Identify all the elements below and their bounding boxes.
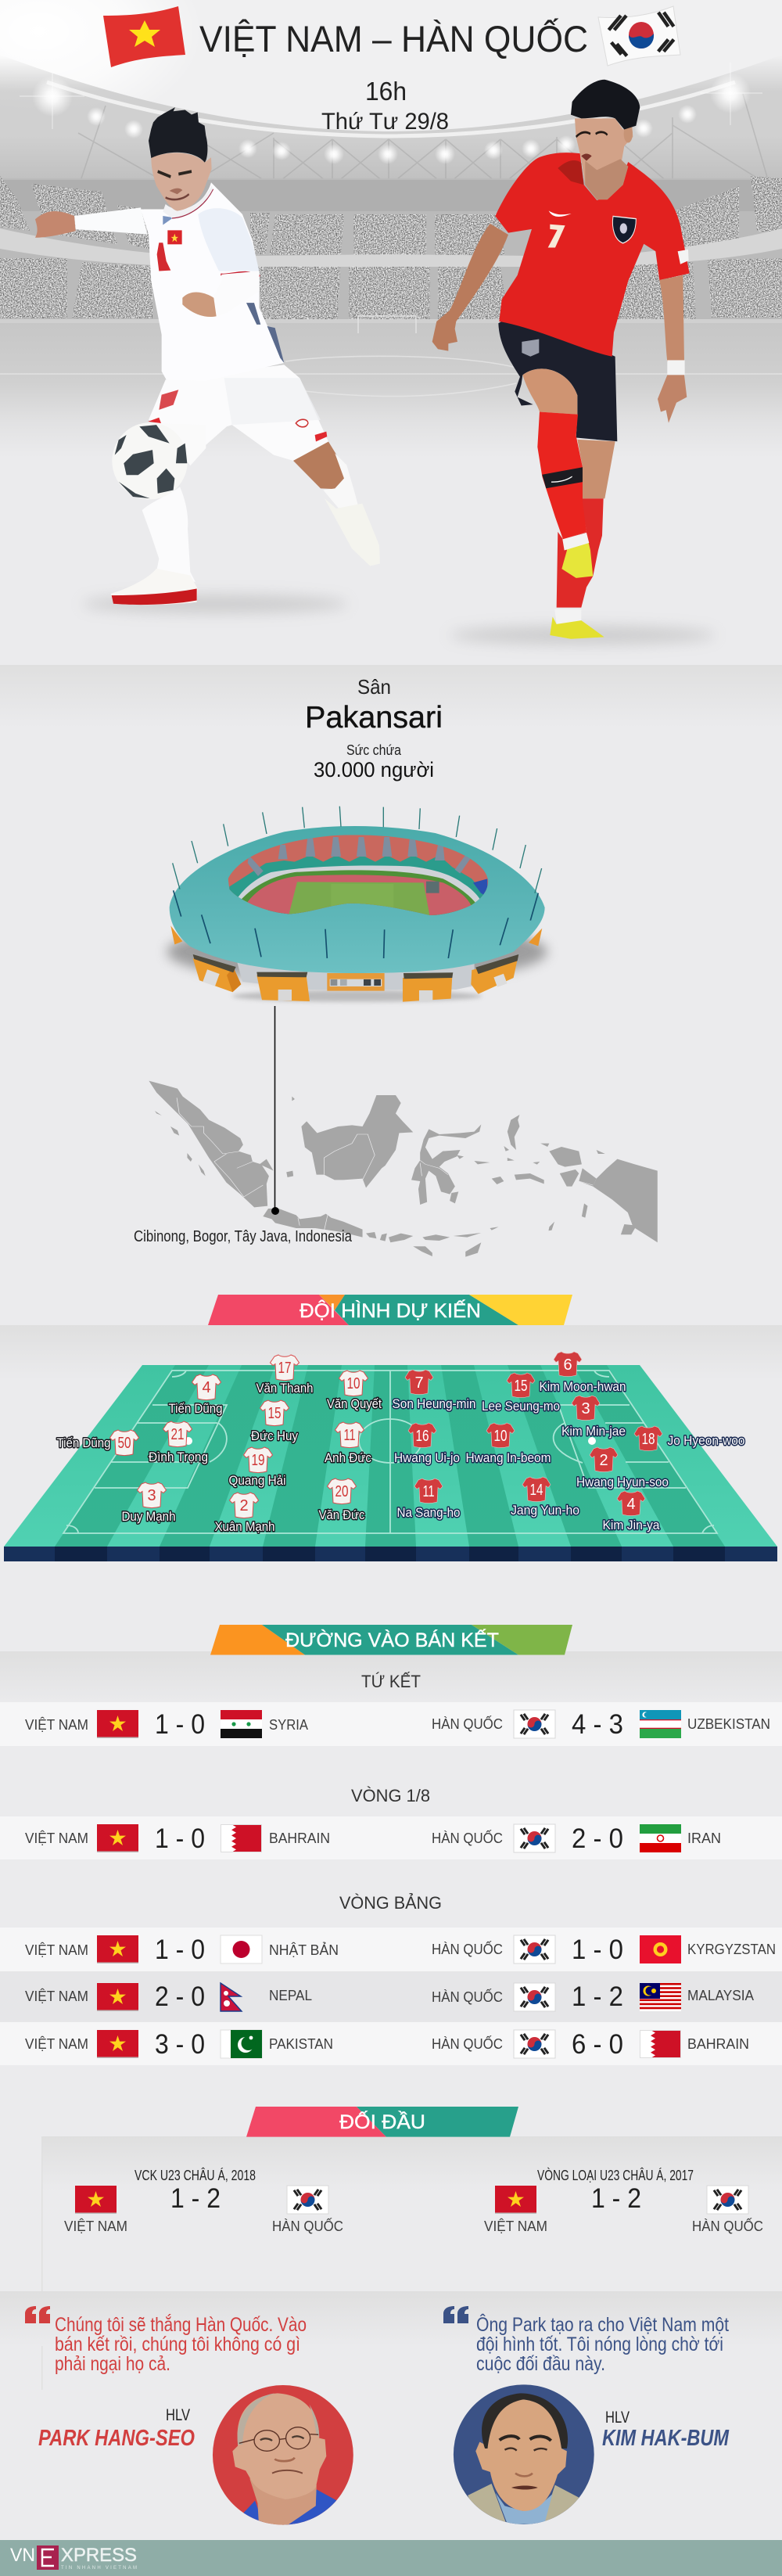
row: group match two: VIỆT NAM bbox=[25, 1989, 88, 2004]
section banner: line-up bbox=[208, 1295, 572, 1325]
name: Park Hang-seo: PARK HANG-SEO bbox=[38, 2426, 195, 2451]
row: quarter-final results bbox=[0, 1702, 782, 1746]
panel: hero match header bbox=[0, 0, 782, 645]
team: Vietnam players: 2 bbox=[239, 1497, 249, 1514]
team: South Korea players: Kim Min-jae bbox=[561, 1424, 626, 1439]
team: Vietnam players bbox=[56, 1355, 382, 1534]
row: group match two: NEPAL bbox=[269, 1988, 312, 2003]
team: South Korea players: Hwang Hyun-soo bbox=[576, 1475, 669, 1489]
team: Vietnam players: 11 bbox=[344, 1427, 355, 1444]
logo: VnExpress: TIN NHANH VIETNAM bbox=[61, 2566, 137, 2571]
team: South Korea players: Kim Moon-hwan bbox=[540, 1379, 626, 1394]
team: South Korea players: Kim Jin-ya bbox=[602, 1518, 660, 1532]
team: Vietnam players: Xuân Mạnh bbox=[214, 1519, 275, 1534]
row: group match three: HÀN QUỐC bbox=[432, 2035, 503, 2052]
label: capacity word: Sức chứa bbox=[346, 742, 402, 758]
label: coach title left: HLV bbox=[166, 2406, 190, 2424]
row: group match one: 1 - 0 bbox=[155, 1935, 205, 1965]
team: South Korea players: 16 bbox=[416, 1428, 429, 1445]
team: Vietnam players: Văn Quyết bbox=[327, 1396, 382, 1411]
row: quarter-final results: SYRIA bbox=[269, 1717, 308, 1733]
logo: VnExpress: VN bbox=[10, 2545, 35, 2566]
team: South Korea players: 14 bbox=[530, 1482, 543, 1499]
heading: stadium name: Pakansari bbox=[305, 701, 443, 735]
team: South Korea players: Hwang Ui-jo bbox=[394, 1450, 460, 1465]
match card: U23 Asian qualifiers 2017: VIỆT NAM bbox=[484, 2219, 547, 2234]
team: Vietnam players: Tiến Dũng bbox=[56, 1435, 111, 1450]
team: South Korea players: 6 bbox=[563, 1356, 572, 1374]
stadium background photo bbox=[0, 0, 782, 458]
match card: U23 Asian qualifiers 2017: HÀN QUỐC bbox=[692, 2218, 763, 2234]
team: Vietnam players: Anh Đức bbox=[325, 1450, 371, 1465]
team: Vietnam players: 20 bbox=[335, 1483, 349, 1500]
team: Vietnam players: 15 bbox=[267, 1405, 282, 1422]
team: South Korea players: 2 bbox=[599, 1452, 608, 1469]
team: Vietnam players: 4 bbox=[202, 1379, 211, 1396]
team: Vietnam players: Quang Hải bbox=[228, 1473, 286, 1488]
section banner: head to head bbox=[246, 2107, 518, 2137]
match card: U23 Asian finals 2018: HÀN QUỐC bbox=[272, 2218, 343, 2234]
team: Vietnam players: Văn Thanh bbox=[256, 1381, 313, 1396]
team: Vietnam players: Đình Trọng bbox=[149, 1450, 208, 1464]
shadow: left player bbox=[82, 595, 348, 613]
number: capacity: 30.000 người bbox=[314, 758, 434, 781]
team: South Korea players bbox=[393, 1352, 744, 1532]
row: group match three: PAKISTAN bbox=[269, 2036, 333, 2052]
row: group match one bbox=[0, 1928, 782, 1971]
team: South Korea players: Hwang In-beom bbox=[466, 1450, 551, 1465]
row: group match three: 6 - 0 bbox=[572, 2029, 623, 2060]
logo: VnExpress bbox=[10, 2545, 137, 2571]
match time: 16h bbox=[365, 77, 407, 106]
heading: round of 16: VÒNG 1/8 bbox=[351, 1786, 430, 1805]
heading: group stage: VÒNG BẢNG bbox=[339, 1893, 442, 1913]
team: South Korea players: 18 bbox=[641, 1431, 655, 1448]
player: South Korea forward in red kit bbox=[432, 80, 690, 639]
portrait: Kim Hak-bum bbox=[454, 2384, 594, 2527]
panel: coach quotes bbox=[0, 2291, 782, 2529]
match card: U23 Asian finals 2018: VIỆT NAM bbox=[64, 2219, 127, 2234]
quote: Park Hang-seo: phải ngại họ cả. bbox=[55, 2353, 170, 2375]
row: group match three bbox=[0, 2022, 782, 2065]
row: round of 16 results bbox=[0, 1816, 782, 1859]
title: VIỆT NAM – HÀN QUỐC bbox=[199, 18, 588, 59]
shadow: right player bbox=[450, 626, 716, 645]
row: quarter-final results: 1 - 0 bbox=[155, 1709, 205, 1740]
row: group match one: NHẬT BẢN bbox=[269, 1942, 339, 1958]
team: Vietnam players: 21 bbox=[170, 1426, 185, 1443]
row: group match one: VIỆT NAM bbox=[25, 1942, 88, 1958]
icon: South Korea waving flag bbox=[598, 6, 680, 66]
crowd stands bbox=[0, 176, 782, 321]
row: round of 16 results: VIỆT NAM bbox=[25, 1831, 88, 1846]
team: South Korea players: Na Sang-ho bbox=[397, 1505, 460, 1520]
match card: U23 Asian finals 2018: VCK U23 CHÂU Á, 2018 bbox=[135, 2168, 256, 2183]
row: round of 16 results: 1 - 0 bbox=[155, 1823, 205, 1854]
section banner: line-up: ĐỘI HÌNH DỰ KIẾN bbox=[300, 1299, 481, 1322]
match card: U23 Asian qualifiers 2017: 1 - 2 bbox=[591, 2183, 641, 2214]
team: Vietnam players: 50 bbox=[117, 1435, 131, 1452]
team: Vietnam players: Văn Đức bbox=[319, 1507, 365, 1522]
team: South Korea players: 11 bbox=[422, 1483, 435, 1500]
icon: Vietnam waving flag bbox=[103, 6, 185, 67]
row: group match two bbox=[0, 1971, 782, 2022]
row: group match one: KYRGYZSTAN bbox=[687, 1942, 776, 1957]
team: South Korea players: Lee Seung-mo bbox=[482, 1399, 560, 1414]
quote mark: red bbox=[25, 2306, 50, 2323]
section banner: road to semi-finals: ĐƯỜNG VÀO BÁN KẾT bbox=[285, 1629, 499, 1651]
team: Vietnam players: 3 bbox=[147, 1487, 156, 1504]
quote: Park Hang-seo: Chúng tôi sẽ thắng Hàn Quốc. Vào bbox=[55, 2313, 307, 2336]
team: South Korea players: Son Heung-min bbox=[393, 1396, 475, 1411]
row: group match three: BAHRAIN bbox=[687, 2036, 749, 2052]
row: group match two: 1 - 2 bbox=[572, 1981, 623, 2012]
row: group match two: HÀN QUỐC bbox=[432, 1989, 503, 2005]
quote: Kim Hak-bum: cuộc đối đầu này. bbox=[476, 2353, 605, 2375]
section banner: road to semi-finals bbox=[210, 1625, 572, 1655]
quote: Kim Hak-bum: Ông Park tạo ra cho Việt Nam một bbox=[476, 2313, 729, 2336]
row: round of 16 results: IRAN bbox=[687, 1831, 721, 1846]
section banner: head to head: ĐỐI ĐẦU bbox=[339, 2110, 425, 2133]
row: group match one: HÀN QUỐC bbox=[432, 1941, 503, 1957]
team: South Korea players: Jo Hyeon-woo bbox=[668, 1433, 744, 1448]
team: Vietnam players: 19 bbox=[252, 1452, 264, 1469]
connector line from stadium to map bbox=[274, 1006, 275, 1211]
team: South Korea players: Jang Yun-ho bbox=[511, 1503, 579, 1518]
row: group match two: 2 - 0 bbox=[155, 1981, 205, 2012]
label: coach title right: HLV bbox=[605, 2409, 630, 2427]
quote: Kim Hak-bum bbox=[476, 2313, 729, 2375]
panel: road to the semi-finals bbox=[0, 1625, 782, 2065]
team: Vietnam players: Tiến Dũng bbox=[169, 1401, 222, 1416]
match date: Thứ Tư 29/8 bbox=[321, 109, 449, 135]
stadium illustration bbox=[167, 807, 547, 1002]
player: Vietnam midfielder in white kit bbox=[35, 107, 380, 605]
match card: U23 Asian qualifiers 2017: VÒNG LOẠI U23 CHÂU Á, 2017 bbox=[537, 2167, 694, 2183]
row: round of 16 results: BAHRAIN bbox=[269, 1831, 330, 1846]
team: South Korea players: 7 bbox=[414, 1374, 424, 1392]
team: South Korea players: 4 bbox=[626, 1496, 636, 1513]
team: Vietnam players: Duy Mạnh bbox=[122, 1509, 175, 1524]
name: Kim Hak-bum: KIM HAK-BUM bbox=[602, 2426, 730, 2451]
match card: U23 Asian qualifiers 2017 bbox=[484, 2167, 763, 2234]
row: quarter-final results: VIỆT NAM bbox=[25, 1717, 88, 1733]
quote: Kim Hak-bum: đội hình tốt. Tôi nóng lòng chờ tới bbox=[476, 2333, 723, 2355]
football pitch bbox=[4, 1365, 777, 1561]
panel: predicted line-up bbox=[0, 1295, 782, 1561]
footer bar bbox=[0, 2540, 782, 2576]
row: round of 16 results: 2 - 0 bbox=[572, 1823, 623, 1854]
row: quarter-final results: HÀN QUỐC bbox=[432, 1716, 503, 1732]
row: group match three: VIỆT NAM bbox=[25, 2036, 88, 2052]
panel: head to head bbox=[41, 2107, 782, 2390]
team: Vietnam players: 10 bbox=[347, 1375, 360, 1392]
caption: stadium location: Cibinong, Bogor, Tây Java, Indonesia bbox=[134, 1228, 353, 1245]
map: Indonesia bbox=[149, 1081, 658, 1257]
match card: U23 Asian finals 2018: 1 - 2 bbox=[170, 2183, 221, 2214]
quote: Park Hang-seo: bán kết rồi, chúng tôi không có gì bbox=[55, 2333, 300, 2355]
team: South Korea players: 15 bbox=[515, 1378, 527, 1395]
quote mark: blue bbox=[443, 2306, 468, 2323]
team: South Korea players: 10 bbox=[494, 1428, 507, 1445]
row: round of 16 results: HÀN QUỐC bbox=[432, 1830, 503, 1846]
row: quarter-final results: 4 - 3 bbox=[572, 1709, 623, 1740]
panel: stadium section bbox=[0, 665, 782, 1257]
match card: U23 Asian finals 2018 bbox=[64, 2168, 343, 2234]
portrait: Park Hang-seo bbox=[213, 2385, 353, 2529]
team: Vietnam players: Đức Huy bbox=[251, 1428, 298, 1443]
team: South Korea players: 3 bbox=[581, 1400, 590, 1417]
logo: VnExpress: XPRESS bbox=[61, 2545, 137, 2566]
row: group match three: 3 - 0 bbox=[155, 2029, 205, 2060]
heading: quarter-final: TỨ KẾT bbox=[361, 1672, 421, 1691]
row: group match one: 1 - 0 bbox=[572, 1935, 623, 1965]
quote: Park Hang-seo bbox=[55, 2313, 307, 2375]
row: group match two: MALAYSIA bbox=[687, 1988, 754, 2003]
label: venue word: Sân bbox=[357, 675, 391, 699]
map marker bbox=[271, 1207, 279, 1215]
row: quarter-final results: UZBEKISTAN bbox=[687, 1716, 770, 1732]
team: Vietnam players: 17 bbox=[278, 1360, 291, 1377]
